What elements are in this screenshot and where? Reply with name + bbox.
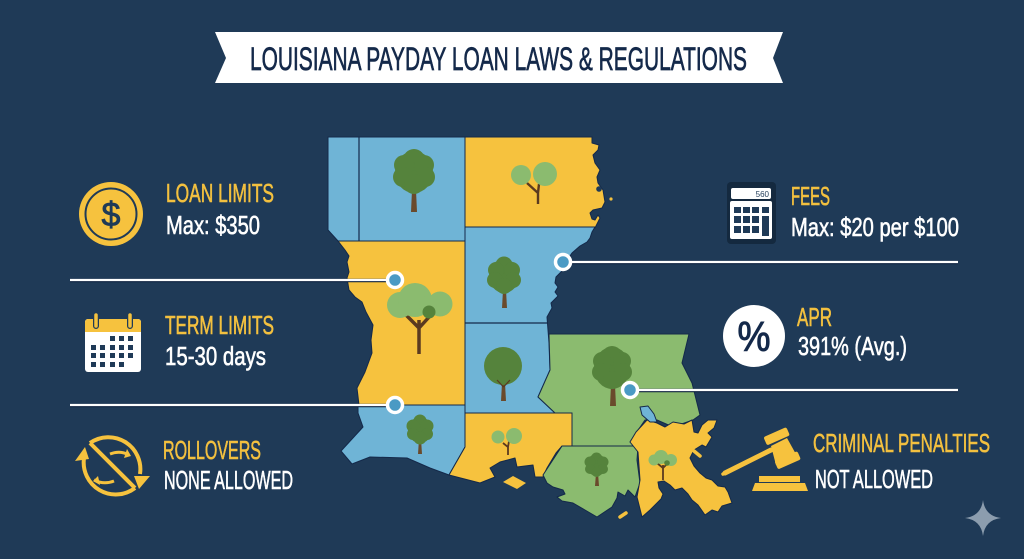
- region: island: [503, 476, 526, 489]
- small delta islands: [620, 451, 738, 517]
- region: south central yellow: [449, 413, 572, 483]
- tree 5: [484, 347, 522, 401]
- region: west yellow: [338, 241, 465, 405]
- region: northwest blue: [328, 137, 465, 241]
- icon: percent: %: [738, 313, 770, 360]
- trees: [387, 149, 677, 486]
- icon: dollar coin: $: [102, 196, 121, 234]
- connector: fees: [556, 254, 958, 270]
- panel: APR: [723, 302, 907, 367]
- region: east green: [538, 334, 700, 446]
- icon: calculator: [727, 182, 776, 244]
- tree 4: [487, 256, 521, 308]
- connector: loan limits: [70, 272, 402, 288]
- connector: term limits: [70, 398, 402, 412]
- icon: calendar: [85, 315, 141, 372]
- icon: no rollover: [75, 437, 150, 494]
- region: northeast hole: [596, 186, 602, 192]
- heading: LOAN LIMITS: [166, 178, 274, 208]
- lake: [640, 406, 657, 422]
- value: 391% (Avg.): [798, 331, 907, 361]
- heading: ROLLOVERS: [163, 435, 261, 465]
- tree 9: [584, 452, 608, 486]
- region: southwest blue: [341, 405, 465, 475]
- panel: criminal penalties: [725, 427, 990, 494]
- value: Max: $350: [166, 210, 260, 240]
- region: northeast dot: [609, 197, 613, 201]
- title banner: [215, 32, 783, 83]
- icon: gavel: [725, 427, 808, 491]
- tree 7: [406, 414, 434, 454]
- region: east central blue: [465, 227, 595, 413]
- region: northeast yellow: [465, 137, 605, 228]
- panel: term limits: [85, 310, 274, 372]
- value: 15-30 days: [165, 341, 266, 371]
- value: NONE ALLOWED: [164, 465, 293, 495]
- region: south green: [543, 446, 640, 517]
- title: LOUISIANA PAYDAY LOAN LAWS & REGULATIONS: [250, 41, 747, 77]
- icon: percent: [723, 305, 785, 367]
- tree 6: [592, 346, 632, 406]
- icon: dollar coin: [79, 182, 143, 246]
- panel: loan limits: [79, 178, 274, 246]
- tree 2: [511, 162, 557, 204]
- heading: FEES: [791, 181, 830, 211]
- value: NOT ALLOWED: [815, 464, 933, 494]
- connector: APR: [622, 382, 958, 398]
- tree 3: [387, 283, 452, 354]
- divider: [359, 137, 547, 323]
- map of Louisiana: [328, 137, 738, 517]
- region: southeast delta yellow: [630, 420, 732, 517]
- heading: APR: [797, 302, 832, 332]
- icon: sparkle: [965, 500, 1001, 536]
- icon: calculator: 560: [756, 190, 770, 199]
- value: Max: $20 per $100: [791, 212, 959, 242]
- panel: rollovers: [75, 435, 293, 495]
- tree 8: [492, 428, 522, 455]
- panel: fees: [727, 181, 959, 244]
- tree 10: [648, 450, 677, 480]
- tree 1: [393, 149, 435, 212]
- heading: TERM LIMITS: [165, 310, 274, 340]
